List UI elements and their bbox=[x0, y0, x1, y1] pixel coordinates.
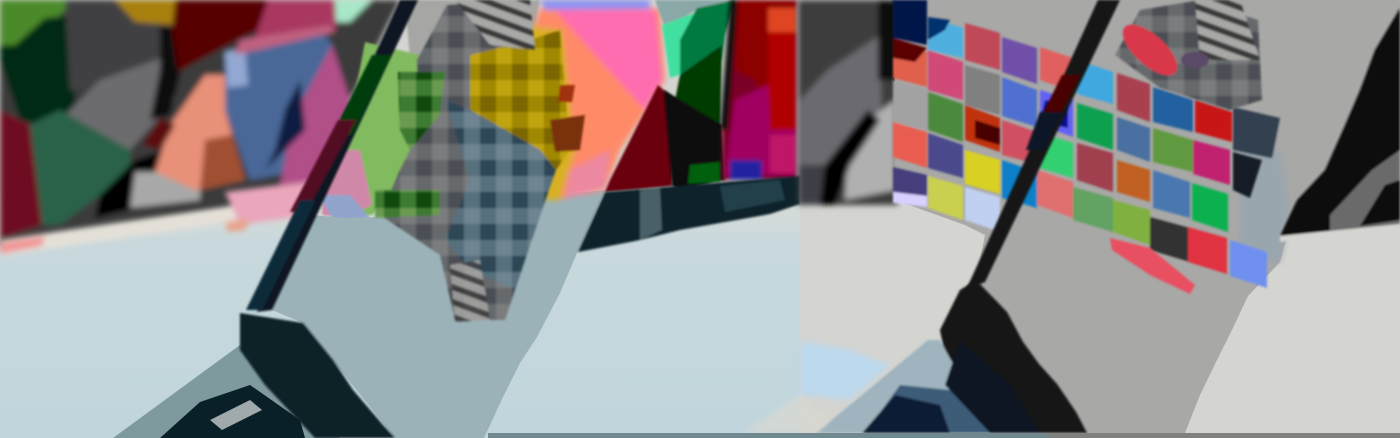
reflection: light blue glow on base bbox=[745, 340, 890, 433]
hinge stripe: left laptop black edge bbox=[240, 0, 418, 314]
hinge stripe: right laptop black edge bbox=[966, 0, 1120, 290]
panel: green and pink right of the stripe bbox=[318, 0, 540, 222]
panel: laptop base, blue-grey keyboard deck bbox=[272, 190, 605, 438]
tiles column 9 bbox=[1188, 100, 1232, 274]
panel: left laptop pink and salmon reflections on base bbox=[0, 180, 320, 256]
panel: right black corner and base edge bbox=[1280, 8, 1400, 242]
tiles column 8 bbox=[1150, 87, 1193, 262]
app tiles: coloured start-screen grid bbox=[893, 0, 1280, 288]
panel: green screen block bbox=[655, 0, 735, 190]
tiles column 10 bbox=[1230, 107, 1280, 288]
tiles column 6 bbox=[1073, 60, 1113, 232]
hinge band: lower left dark keyboard edge bbox=[240, 313, 395, 438]
panel: centre grey laptop lid bbox=[798, 0, 898, 205]
hinge band: right laptop dark edge and keyboard bbox=[816, 280, 1087, 433]
tiles column 1 bbox=[893, 0, 927, 207]
tiles column 3 bbox=[965, 23, 1000, 232]
right laptop: grey keys and pill shapes bbox=[1110, 0, 1262, 294]
tiles column 7 bbox=[1113, 73, 1150, 245]
tiles column 4 bbox=[1002, 37, 1037, 208]
panel: pink and orange screen area bbox=[520, 0, 665, 200]
keyboard corner: lower left grey-blue deck bbox=[113, 345, 340, 438]
bottom strip: grey artefact line bbox=[488, 433, 1400, 438]
panel: left laptop screen with colour blocks bbox=[0, 0, 400, 245]
panel: dark hinge of the left laptop bbox=[578, 176, 800, 252]
panel: right laptop grey screen bbox=[895, 0, 1400, 438]
keyboard: left laptop mosaic keys bbox=[375, 0, 585, 322]
tiles column 2 bbox=[928, 17, 963, 220]
panel: red and magenta block bbox=[720, 0, 797, 180]
tiles column 5 bbox=[1037, 47, 1073, 218]
panel: maroon triangle bbox=[605, 85, 675, 192]
